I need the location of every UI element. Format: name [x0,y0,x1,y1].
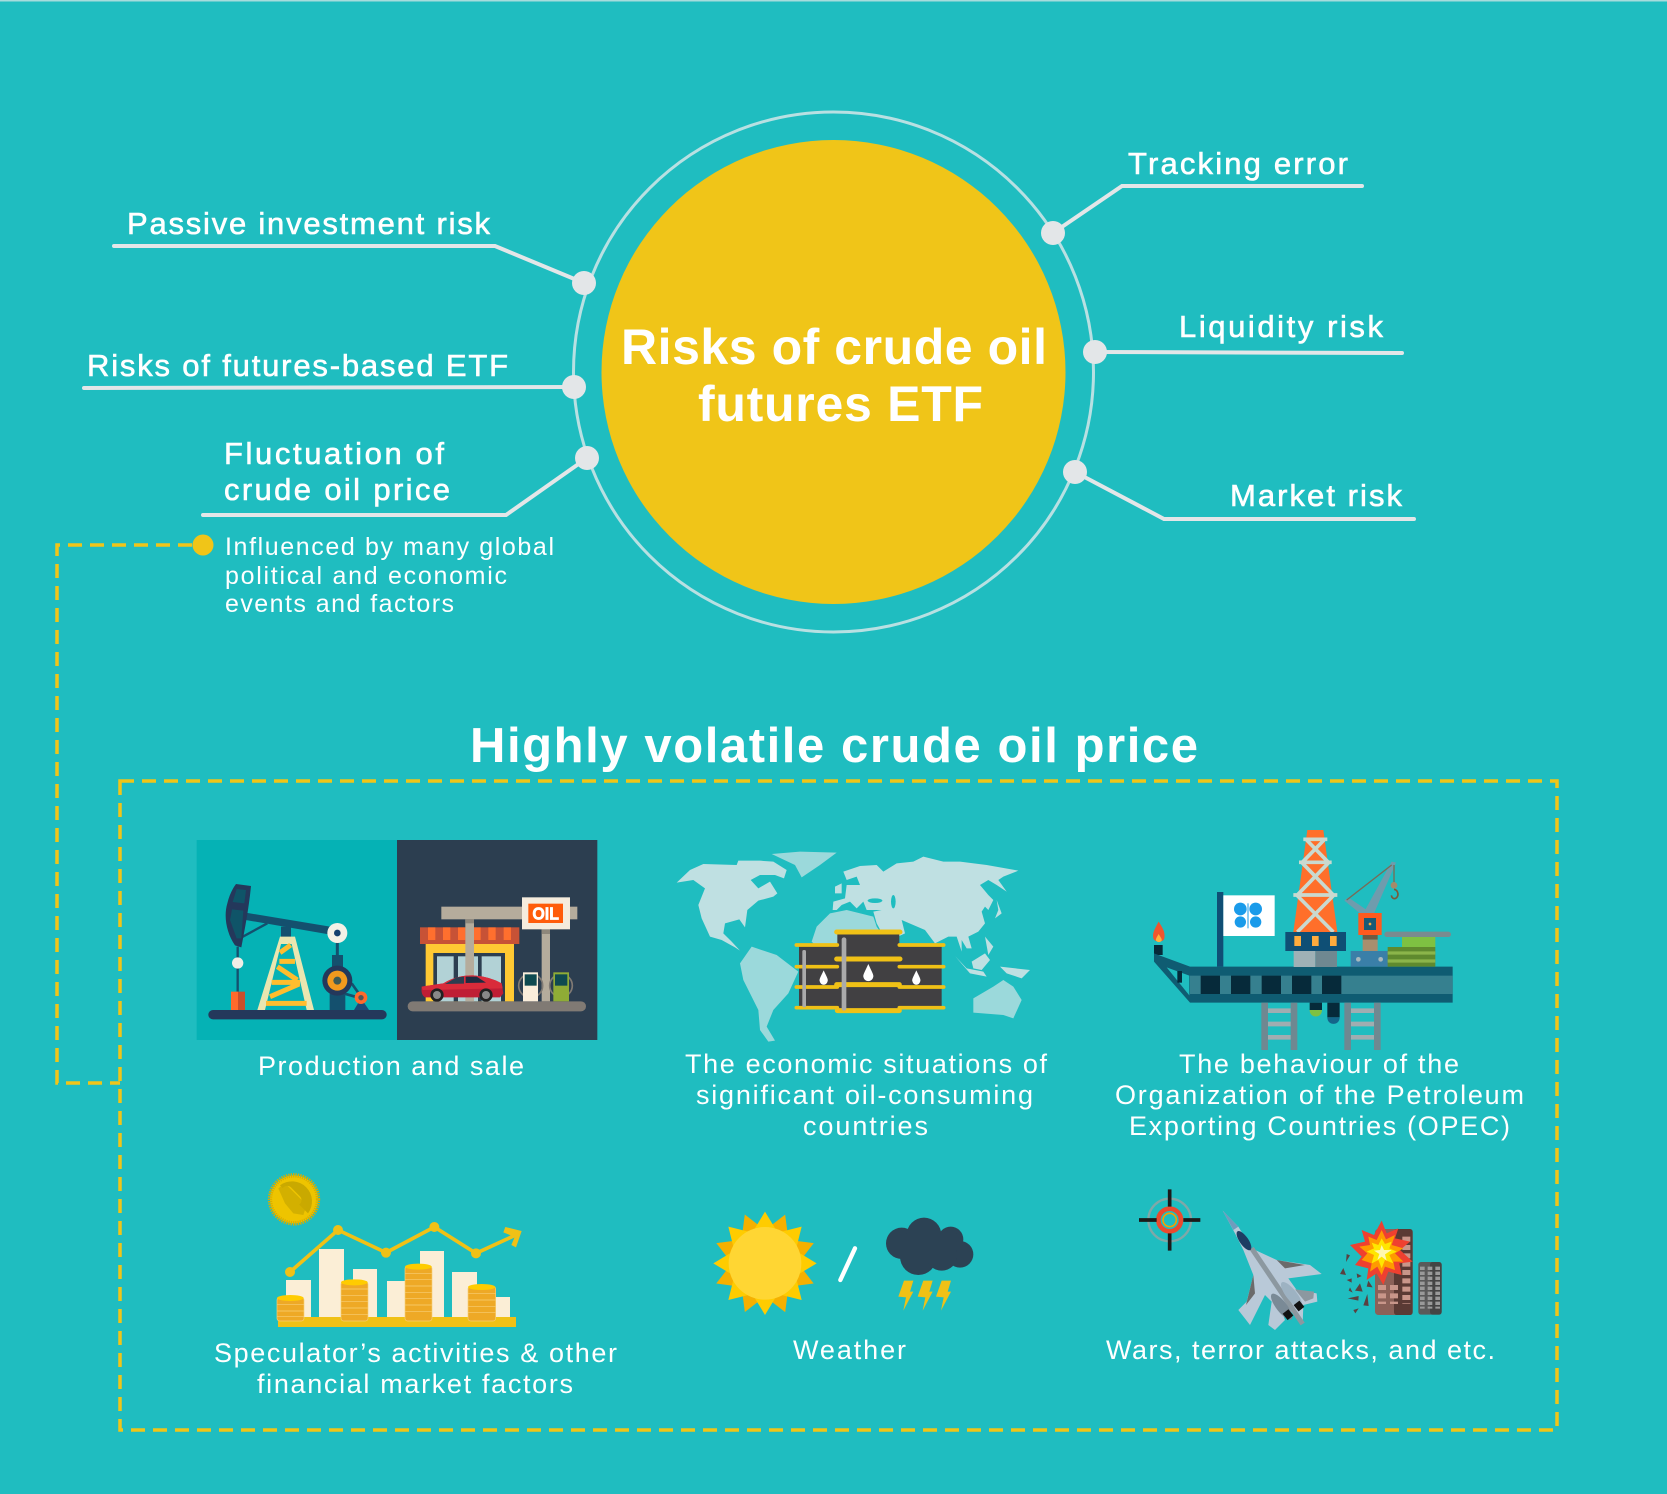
icon: coin, bar chart and trend arrow [270,1175,522,1327]
note: influenced by many global events: Influenced by many global [225,533,554,561]
arrow: dashed connector from note to box [57,545,192,1083]
icon: target, fighter jet and exploding buildings [1139,1189,1442,1330]
caption: speculators: financial market factors [257,1369,573,1399]
caption: economic situations: significant oil-consuming [696,1080,1033,1110]
note: influenced by many global events [192,533,554,618]
label: fluctuation of crude oil price [203,436,599,515]
caption: OPEC behaviour: The behaviour of the [1179,1049,1459,1079]
caption: economic situations: The economic situations of [685,1049,1047,1079]
note: influenced by many global events: events and factors [225,590,454,618]
caption: production and sale: Production and sale [258,1051,524,1081]
label: liquidity risk [1083,309,1402,364]
label: fluctuation of crude oil price: Fluctuation of [224,436,444,471]
caption: weather: Weather [793,1335,906,1365]
label: tracking error [1041,146,1362,245]
label: fluctuation of crude oil price: crude oil price [224,472,450,507]
label: passive investment risk [114,206,596,295]
circle title [621,319,1047,432]
icon: oil pump and petrol station: OIL [532,903,559,923]
label: risks of futures-based ETF: Risks of futures-based ETF [87,348,508,383]
caption: OPEC behaviour: Exporting Countries (OPEC) [1129,1111,1510,1141]
caption: speculators: Speculator’s activities & other [214,1338,617,1368]
caption: economic situations: countries [803,1111,928,1141]
label: market risk: Market risk [1230,478,1402,513]
panel: dashed factors box [120,781,1557,1430]
caption: OPEC behaviour [1115,1049,1524,1141]
icon: oil pump and petrol station [197,840,597,1040]
panel: central risk circle [574,112,1094,632]
caption: OPEC behaviour: Organization of the Petroleum [1115,1080,1524,1110]
label: liquidity risk: Liquidity risk [1179,309,1384,344]
label: market risk [1063,460,1414,519]
circle title: Risks of crude oil [621,319,1047,375]
icon: world map with oil barrels [677,852,1030,1042]
label: risks of futures-based ETF [84,348,586,399]
icon: sun and storm cloud [696,1195,973,1332]
caption: economic situations [685,1049,1047,1141]
heading: highly volatile crude oil price: Highly volatile crude oil price [470,719,1198,773]
note: influenced by many global events: political and economic [225,562,507,590]
icon: OPEC offshore oil rig [1153,830,1453,1050]
caption: wars and terror attacks: Wars, terror attacks, and etc. [1106,1335,1495,1365]
caption: speculators [214,1338,617,1399]
label: tracking error: Tracking error [1128,146,1348,181]
label: passive investment risk: Passive investment risk [127,206,490,241]
circle title: futures ETF [698,376,983,432]
